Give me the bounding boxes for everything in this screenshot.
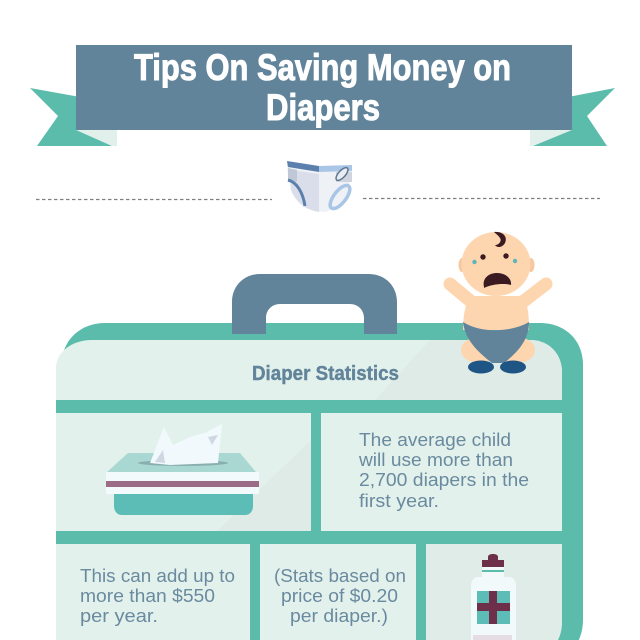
box opening — [138, 460, 228, 466]
heading: diaper statistics: Diaper Statistics — [252, 363, 399, 385]
left shoe — [468, 360, 494, 374]
case handle — [232, 274, 397, 334]
cost text: This can add up to — [80, 566, 235, 586]
panel: price basis — [260, 544, 416, 640]
usage text: first year. — [359, 491, 439, 511]
usage text: will use more than — [358, 450, 513, 470]
header panel — [56, 340, 562, 400]
cell background — [56, 413, 311, 531]
icon: diaper — [287, 161, 353, 212]
usage text: The average child — [359, 430, 511, 450]
box stripe — [106, 481, 259, 487]
price text: per diaper.) — [290, 606, 388, 626]
right eye — [503, 253, 509, 259]
label square — [477, 591, 510, 624]
bottle neck stripe — [482, 570, 504, 572]
right ribbon fold — [530, 130, 572, 146]
panel: medicine bottle — [426, 544, 562, 640]
tissue fold shade right — [208, 435, 218, 445]
banner band — [76, 45, 572, 130]
hair curl — [494, 232, 506, 247]
left ear — [458, 258, 466, 272]
right ear — [528, 258, 534, 272]
left ribbon tail — [30, 88, 112, 146]
box white band — [106, 472, 259, 494]
panel: first year usage — [321, 413, 562, 531]
left edge background — [56, 400, 62, 640]
left tear — [472, 260, 477, 264]
box top — [107, 453, 256, 472]
bottle cap — [482, 554, 504, 567]
right ribbon tail — [533, 88, 615, 146]
cost text: more than $550 — [80, 586, 215, 606]
title text: Diapers — [266, 87, 380, 128]
price text: price of $0.20 — [281, 586, 398, 606]
head — [462, 232, 530, 296]
left eye — [480, 254, 486, 260]
cell background — [56, 544, 250, 640]
left ribbon fold — [76, 130, 117, 146]
medical cross — [477, 591, 510, 624]
left leg — [461, 337, 497, 363]
tissue — [150, 424, 222, 465]
right tear — [513, 259, 517, 263]
left dashed divider — [36, 198, 272, 200]
torso — [463, 296, 529, 330]
panel: tissue box — [56, 413, 311, 531]
bottle lower label — [473, 635, 512, 640]
right leg — [499, 337, 535, 363]
briefcase — [56, 274, 583, 640]
bottle body — [471, 567, 516, 640]
box base — [114, 494, 253, 515]
cell background — [321, 413, 562, 531]
price text: (Stats based on — [274, 566, 406, 586]
header panel shading — [375, 340, 562, 400]
diaper on baby — [463, 322, 529, 363]
panel: yearly cost — [56, 544, 250, 640]
usage text: 2,700 diapers in the — [359, 470, 529, 490]
left arm — [450, 284, 474, 304]
cell shading — [217, 440, 311, 531]
cell background — [260, 544, 416, 640]
icon: crying baby — [450, 232, 546, 374]
tissue fold shade left — [155, 450, 165, 463]
right dashed divider — [363, 198, 600, 200]
mouth — [484, 273, 511, 288]
cost text: per year. — [80, 606, 158, 626]
right shoe — [500, 360, 526, 374]
right arm — [520, 284, 546, 304]
case outer shell — [62, 323, 583, 640]
title text: Tips On Saving Money on — [134, 47, 511, 88]
cell background — [426, 544, 562, 640]
title banner — [30, 45, 615, 146]
